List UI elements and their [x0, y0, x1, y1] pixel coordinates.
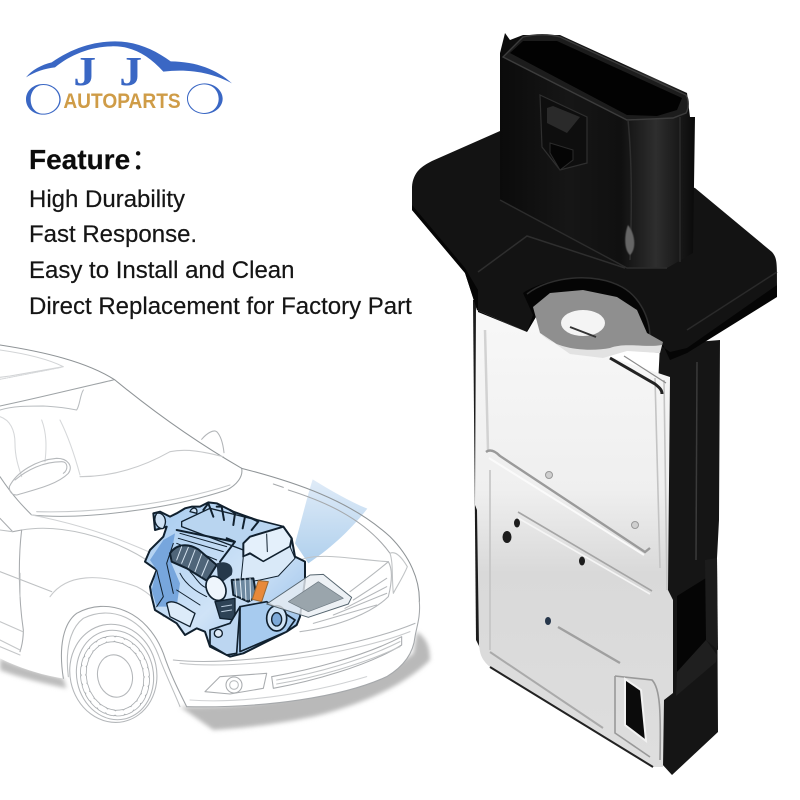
- logo letter J: J: [73, 48, 96, 94]
- manifold runners: [177, 572, 208, 605]
- cam rail: [177, 530, 235, 562]
- corrugated hose: [170, 545, 217, 581]
- valve cover: [182, 508, 290, 562]
- feature: durability: High Durability: [29, 186, 185, 213]
- plate window: [625, 679, 646, 741]
- feature: replacement: Direct Replacement for Factory Part: [29, 293, 412, 320]
- body white fill: [0, 345, 420, 707]
- connector mouth: [503, 35, 688, 120]
- lower grille and fog light: [272, 637, 402, 688]
- logo: JJ Autoparts: [26, 41, 232, 115]
- air filter panel: [267, 574, 352, 617]
- intake duct: [232, 578, 257, 602]
- flange: [412, 131, 777, 360]
- connector plug: [500, 33, 695, 268]
- intake plenum cover: [243, 527, 292, 562]
- engine illustration: [145, 502, 352, 657]
- metal plate: [475, 305, 673, 767]
- logo car roof swoosh: [26, 41, 232, 83]
- engine silhouette: [145, 502, 305, 657]
- ground shadow: [0, 632, 430, 730]
- bumper and grille: [187, 602, 420, 707]
- mass air flow sensor highlight: [252, 581, 268, 602]
- left shaded block: [150, 533, 180, 607]
- light beam: [295, 479, 367, 563]
- spark plug row: [203, 503, 258, 530]
- left edge shadow: [473, 300, 481, 650]
- feature: response: Fast Response.: [29, 221, 197, 248]
- throttle body: [202, 573, 230, 604]
- feature: install: Easy to Install and Clean: [29, 257, 294, 284]
- logo left wheel: [26, 84, 61, 115]
- feature heading: Feature：: [29, 144, 159, 175]
- plate pressed ridges: [486, 451, 650, 552]
- connector latch: [540, 95, 587, 170]
- wheel arch: [61, 606, 187, 707]
- filter mesh: [288, 582, 343, 612]
- flange lower lip: [412, 205, 777, 360]
- belt pulley area: [240, 602, 295, 652]
- windshield base: [0, 468, 242, 516]
- side housing: [640, 340, 720, 775]
- door and fender: [0, 518, 23, 652]
- mirror: [202, 431, 224, 453]
- dash and seats: [80, 450, 223, 477]
- feature list: [29, 186, 412, 320]
- car line illustration: [0, 345, 430, 731]
- logo letter J second: J: [119, 48, 142, 94]
- roof and windshield: [0, 345, 242, 468]
- side window recess: [677, 578, 706, 672]
- product: mass air flow sensor: [412, 33, 777, 775]
- mounting washer: [533, 290, 663, 357]
- logo wordmark: AUTOPARTS: [63, 89, 181, 113]
- plate holes: [502, 531, 512, 543]
- hood: [242, 468, 419, 602]
- logo right wheel: [187, 83, 223, 114]
- front wheel: [61, 616, 166, 731]
